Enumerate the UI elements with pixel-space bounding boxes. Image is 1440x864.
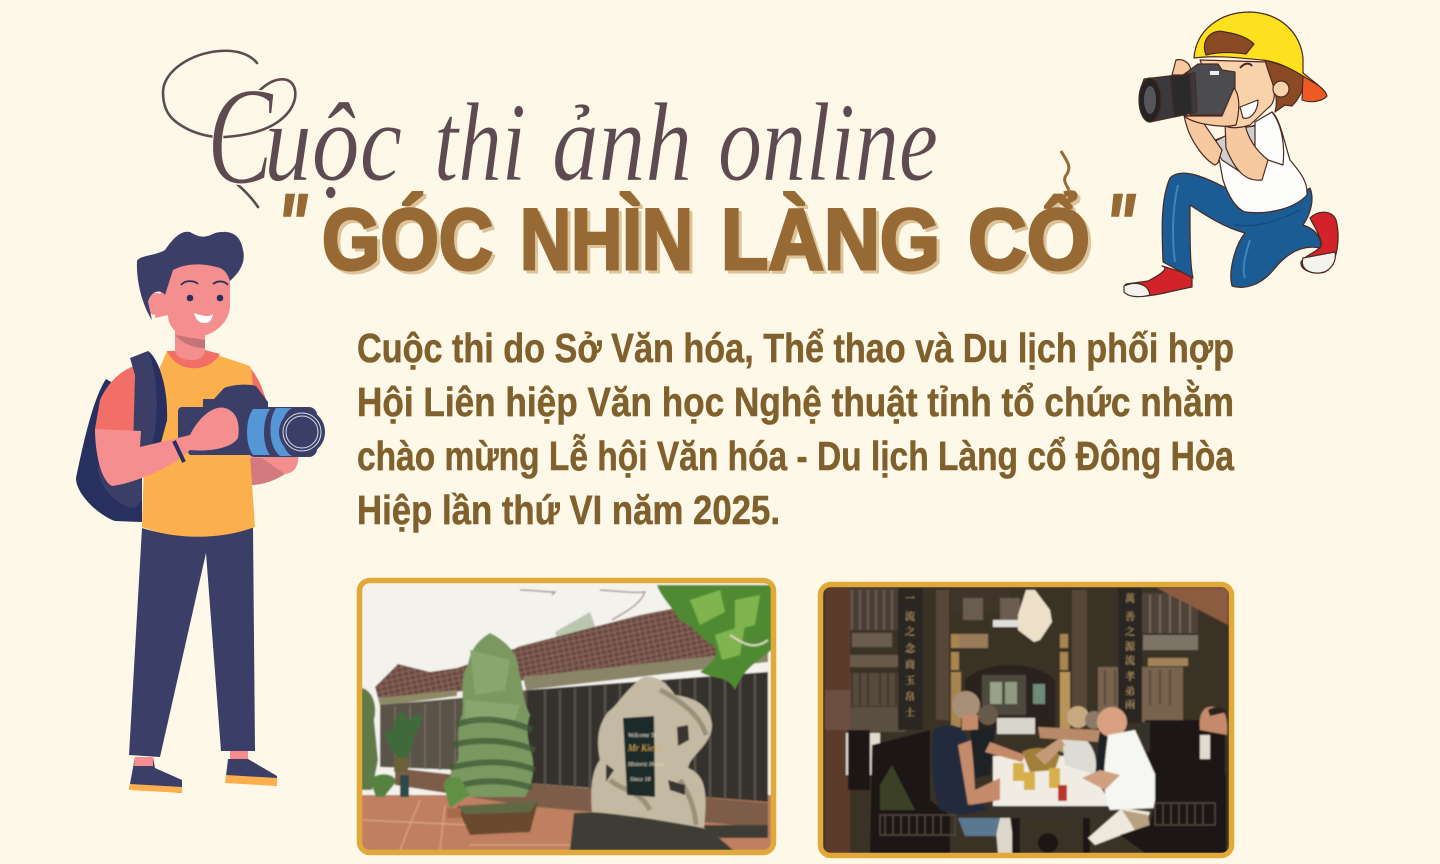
hair [1265,60,1304,112]
floor base [362,795,771,850]
title: script line: ảnh [552,81,692,205]
sign text [627,733,665,783]
left bushes and palm [362,688,378,790]
description text block [357,325,1235,533]
bonsai [444,633,538,835]
strap [130,351,167,449]
right bench [1120,774,1226,853]
sign text: Mr Kiet's [627,743,662,753]
neck [175,325,205,360]
calligraphy columns: 士 [905,704,915,719]
table [993,756,1113,806]
description text block: Hội Liên hiệp Văn học Nghệ thuật tỉnh tổ chức nhằm [357,379,1234,425]
jeans [1162,173,1320,287]
title: contest name: GÓC [325,195,496,291]
photo: old wooden house with stone sign [360,581,773,852]
back chairs and table cloths [846,733,880,775]
sleeve [95,363,142,432]
calligraphy columns [898,588,1142,730]
camera [1139,64,1235,122]
illustration: standing photographer with backpack [76,232,325,793]
shoes [129,751,277,793]
title: contest name: LÀNG [721,192,940,288]
photo: diners in traditional wooden hall [821,585,1231,855]
chandelier [1018,590,1052,642]
title: script line: uộc [264,81,402,205]
foreground leaves [520,585,771,690]
title: contest name: CỔ [968,192,1090,288]
calligraphy columns: 商 [905,656,915,671]
description text block: Hiệp lần thứ VI năm 2025. [357,487,780,533]
face [1200,60,1274,128]
sign text: Historic House [627,762,665,768]
front arm and hand [95,407,239,486]
yellow shirt [142,351,255,537]
title: script line: online [718,81,938,205]
dark pillar [825,588,850,853]
sign text: Welcome To [628,733,657,739]
title: contest name: " [1105,177,1136,273]
upper lattice [846,588,898,630]
illustration: kneeling photographer with yellow cap [1124,12,1338,297]
description text block: chào mừng Lễ hội Văn hóa - Du lịch Làng cổ Đông Hòa [357,433,1235,479]
calligraphy columns: 弟 [1125,683,1135,698]
cap [1194,12,1327,102]
calligraphy columns: 源 [1125,638,1136,653]
title: contest name: NHÌN [520,192,693,288]
left bench [870,730,950,853]
sign text: Since 18 [630,777,650,783]
calligraphy columns: 善 [1125,608,1135,623]
title: script line: thi [434,81,526,205]
brick base [395,768,768,828]
walls [527,672,768,802]
description text block: Cuộc thi do Sở Văn hóa, Thể thao và Du lịch phối hợp [357,325,1234,371]
photo frame [821,585,1231,855]
sleeves and arm behind [248,366,266,400]
arms [1184,115,1222,165]
calligraphy columns: 兩 [1125,696,1135,711]
title: contest name: LÀNG [724,195,943,291]
wooden panels [952,634,988,648]
photo frame [360,581,773,852]
calligraphy columns: 一 [905,590,915,605]
stone base [570,812,733,850]
title: contest name [277,151,1136,291]
hands [1172,60,1190,75]
calligraphy columns: 玉 [905,672,915,687]
head [137,232,244,338]
calligraphy columns: 萬 [1125,590,1135,605]
stone sign [591,677,712,828]
calligraphy columns: 流 [905,608,915,623]
roofs [516,608,718,678]
calligraphy columns: 孝 [1125,668,1135,683]
terrace floor lines [362,800,590,850]
camera with lens [178,385,325,457]
shirt [1215,112,1307,213]
backpack [76,379,142,522]
title: contest name: CỔ [971,195,1093,291]
calligraphy columns: 帛 [905,688,915,703]
title: script line [163,51,938,214]
trousers [129,527,255,757]
title: contest name: NHÌN [523,195,696,291]
central doorway [965,665,1055,730]
calligraphy columns: 之 [1125,623,1135,638]
calligraphy columns: 之 [905,623,915,638]
diners [932,691,1160,845]
calligraphy columns: 流 [1125,652,1135,667]
shoes [1124,212,1338,297]
title: script line: C [207,59,274,214]
title: contest name: " [277,177,308,273]
title: contest name: GÓC [322,192,493,288]
calligraphy columns: 念 [905,640,916,655]
